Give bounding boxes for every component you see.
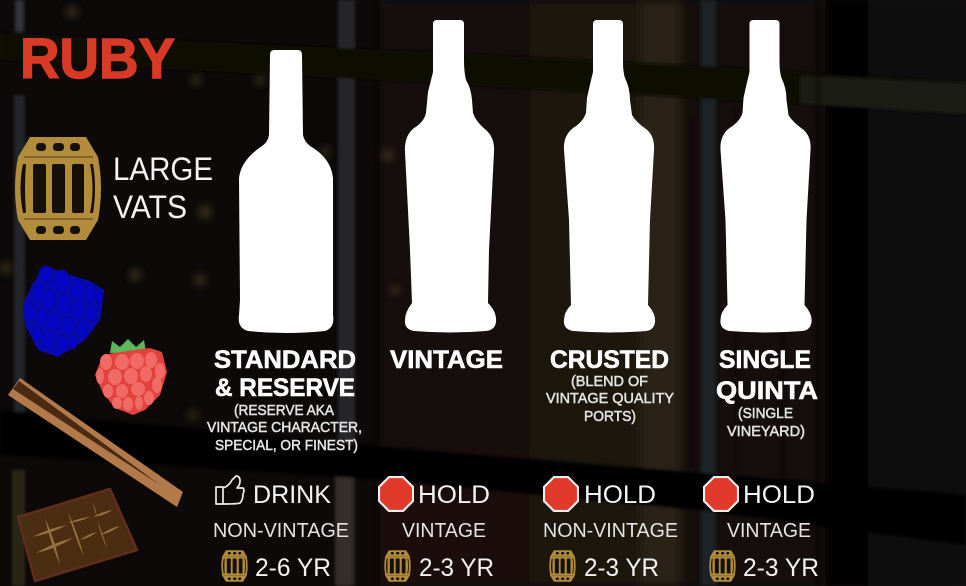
bottle: vintage (405, 20, 496, 332)
icon: stop sign (704, 477, 738, 511)
heading: vintage: VINTAGE (390, 346, 503, 374)
heading: crusted: CRUSTED (550, 346, 669, 374)
icon: raspberry (95, 339, 167, 415)
type: vintage: VINTAGE (727, 520, 811, 542)
icon: stop sign (544, 477, 578, 511)
aging: 2-3 yr: 2-3 YR (743, 554, 819, 582)
icon: blackberry (23, 266, 104, 357)
type: non-vintage: NON-VINTAGE (543, 520, 678, 542)
label: large vats: VATS (113, 189, 187, 225)
aging: 2-3 yr: 2-3 YR (419, 554, 494, 582)
heading: standard and reserve: STANDARD (214, 346, 356, 374)
heading: single quinta: SINGLE (719, 346, 811, 374)
heading: single quinta: QUINTA (716, 377, 818, 405)
status: drink: DRINK (253, 481, 331, 509)
label: large vats: LARGE (113, 151, 213, 187)
aging: 2-6 yr: 2-6 YR (255, 554, 331, 582)
status: hold: HOLD (584, 481, 656, 509)
note: blend of vintage quality ports: (BLEND OF (571, 374, 648, 390)
note: blend of vintage quality ports: VINTAGE QUALITY (546, 391, 674, 407)
icon: cinnamon stick (8, 378, 183, 507)
bottle: standard and reserve (239, 50, 333, 333)
note: blend of vintage quality ports (546, 374, 674, 425)
icon: small barrel (221, 550, 248, 582)
note: reserve aka: (RESERVE AKA (234, 403, 334, 419)
bottle: crusted (564, 20, 655, 332)
icon: small barrel (384, 550, 411, 582)
note: reserve aka (207, 403, 362, 454)
note: single vineyard: VINEYARD) (727, 424, 805, 440)
bottle: single quinta (720, 20, 812, 332)
status: hold: HOLD (743, 481, 815, 509)
note: single vineyard (727, 406, 805, 440)
icon: chocolate bar (18, 489, 137, 581)
note: single vineyard: (SINGLE (738, 406, 793, 422)
note: reserve aka: SPECIAL, OR FINEST) (215, 438, 358, 454)
aging: 2-3 yr: 2-3 YR (584, 554, 659, 582)
icon: large barrel (15, 137, 101, 240)
note: reserve aka: VINTAGE CHARACTER, (207, 420, 362, 436)
note: blend of vintage quality ports: PORTS) (584, 409, 636, 425)
label: large vats (113, 151, 213, 225)
icon: small barrel (709, 550, 736, 582)
heading: standard and reserve (207, 346, 362, 454)
icon: small barrel (549, 550, 576, 582)
heading: standard and reserve: & RESERVE (215, 374, 355, 402)
title: RUBY (20, 27, 175, 91)
icon: thumbs up (216, 476, 244, 504)
status: hold: HOLD (418, 481, 490, 509)
icon: stop sign (379, 477, 413, 511)
heading: single quinta (716, 346, 818, 440)
type: non-vintage: NON-VINTAGE (213, 520, 349, 542)
type: vintage: VINTAGE (402, 520, 486, 542)
heading: crusted (546, 346, 674, 425)
